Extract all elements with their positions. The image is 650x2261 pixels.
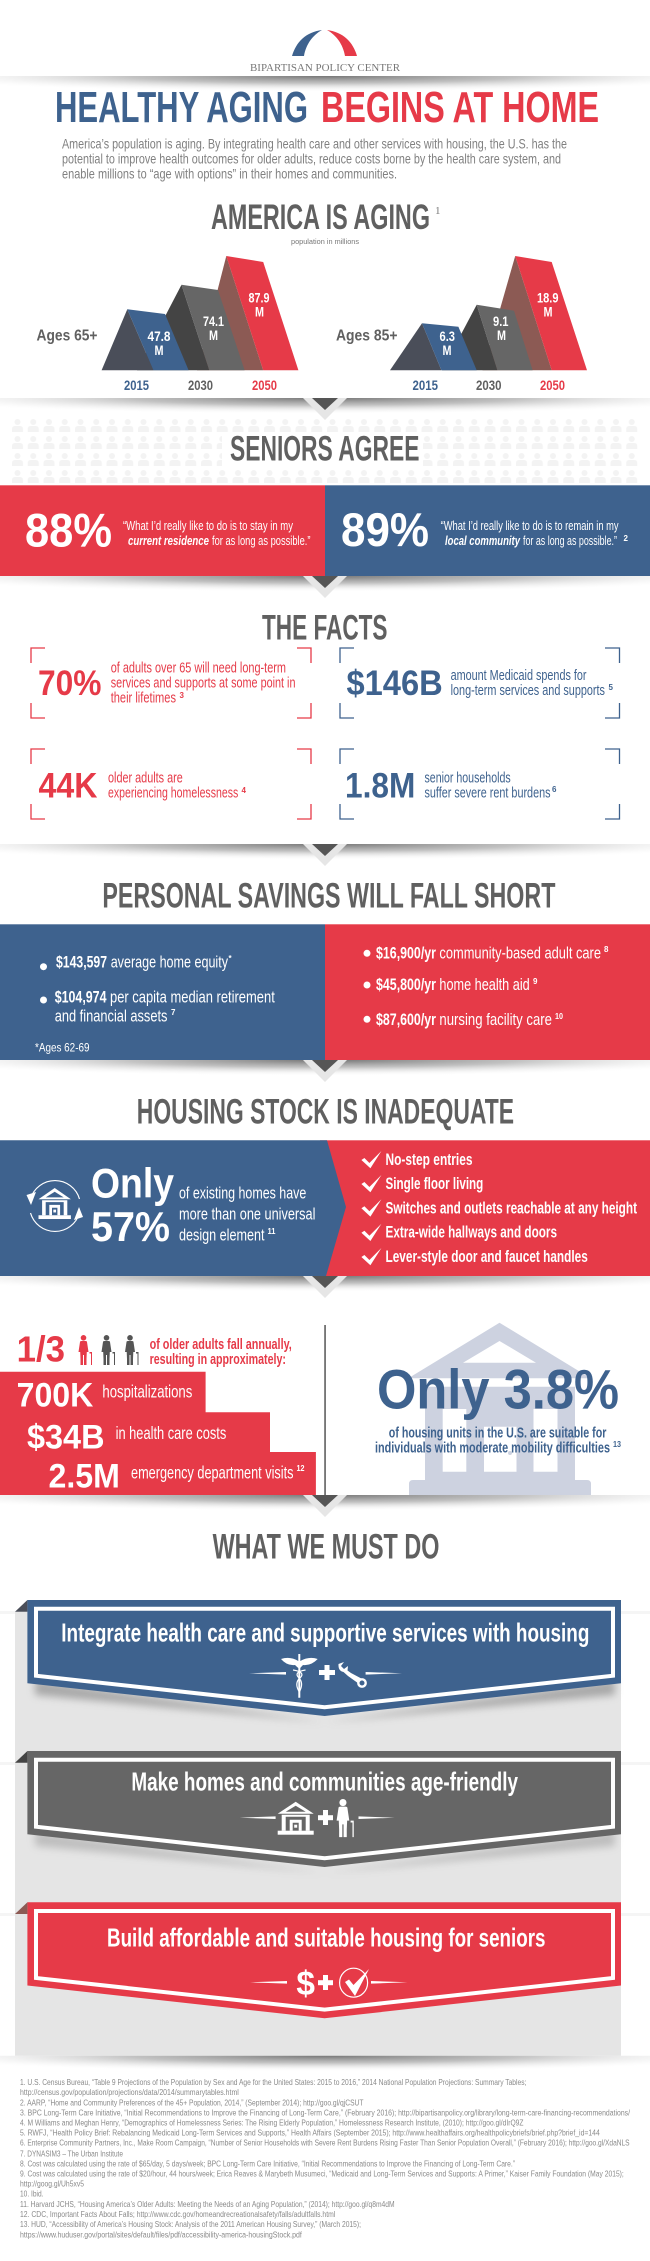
banner: age-friendly xyxy=(15,1751,621,1873)
panel: universal design list xyxy=(320,1140,650,1276)
panel: care costs xyxy=(325,924,650,1060)
chart: ages 85+: M xyxy=(497,328,506,343)
panel: savings: $143,597 xyxy=(56,953,107,971)
chart: ages 65+: 2015 xyxy=(124,377,149,393)
panel: falls: 700K xyxy=(17,1377,94,1415)
panel: care costs: 10 xyxy=(555,1012,563,1021)
chart: ages 85+: 2050 xyxy=(540,377,565,393)
footnotes: http://census.gov/population/projections/data/2014/summarytables.html xyxy=(20,2087,239,2097)
panel: 89%: 89% xyxy=(341,503,429,556)
fact: $146B: amount Medicaid spends for xyxy=(451,668,587,684)
chart: ages 65+: M xyxy=(209,328,218,343)
panel: care costs: 9 xyxy=(533,977,538,986)
panel: 88% xyxy=(0,485,325,576)
heading: America is aging: AMERICA IS AGING xyxy=(211,198,430,237)
chart: ages 65+: Ages 65+ xyxy=(36,328,98,345)
footnotes: 10. Ibid. xyxy=(20,2188,44,2198)
chart: ages 65+: 87.9 xyxy=(248,291,270,306)
arrow xyxy=(303,576,347,598)
panel: care costs: $87,600/yr xyxy=(376,1011,436,1029)
panel: falls: in health care costs xyxy=(116,1423,226,1443)
panel: 88%: “What I’d really like to do is to stay in my xyxy=(123,518,293,533)
icon: dollar, plus, check: $ xyxy=(296,1965,315,2003)
footnotes: 13. HUD, “Accessibility of America’s Housing Stock: Analysis of the 2011 American Housing Survey,” (March 2015); xyxy=(20,2219,361,2229)
panel: savings: *Ages 62-69 xyxy=(35,1041,90,1055)
fact: 1.8M: suffer severe rent burdens xyxy=(424,786,550,802)
panel: only 57%: Only xyxy=(91,1160,175,1207)
fact: 70% xyxy=(31,648,311,718)
title xyxy=(55,84,599,132)
chart: ages 85+: M xyxy=(544,305,552,320)
panel: falls: 1/3 xyxy=(17,1329,65,1370)
chart: ages 85+: 2015 xyxy=(412,377,438,393)
chart: ages 85+: 2030 xyxy=(476,377,502,393)
panel: falls: hospitalizations xyxy=(102,1382,192,1402)
chart: ages 65+: M xyxy=(255,305,264,320)
chart: ages 85+: M xyxy=(442,343,452,358)
icon: house, plus, older adult xyxy=(240,1799,395,1837)
chart: ages 85+: 6.3 xyxy=(440,329,455,344)
banner: age-friendly: Make homes and communities age-friendly xyxy=(131,1767,518,1797)
fact: 70%: of adults over 65 will need long-term xyxy=(111,661,286,677)
panel: only 3.8%: 13 xyxy=(613,1440,621,1449)
panel: universal design list: No-step entries xyxy=(386,1151,472,1169)
panel: savings: and financial assets xyxy=(55,1008,168,1026)
banner: integrate xyxy=(15,1600,621,1722)
fact: 1.8M: senior households xyxy=(424,771,511,787)
fact: 44K: older adults are xyxy=(108,771,183,787)
chart: ages 85+: 18.9 xyxy=(537,291,558,306)
heading: the facts: THE FACTS xyxy=(262,608,388,648)
panel: only 57%: design element xyxy=(179,1227,265,1245)
panel: care costs: community-based adult care xyxy=(439,945,601,963)
panel: savings: average home equity xyxy=(111,953,229,971)
fact: 1.8M: 6 xyxy=(552,785,557,794)
arrow xyxy=(303,1060,347,1082)
panel: care costs: $16,900/yr xyxy=(376,945,436,963)
chart: ages 65+: 2030 xyxy=(188,377,213,393)
panel: actions background xyxy=(15,1612,621,2056)
footnotes: http://goog.gl/Uh5xv5 xyxy=(20,2178,84,2188)
heading: America is aging: 1 xyxy=(435,205,440,217)
panel: only 57%: of existing homes have xyxy=(179,1184,306,1202)
fact: 70%: 3 xyxy=(180,691,184,700)
arrow xyxy=(303,844,347,866)
panel: 88%: for as long as possible.” xyxy=(212,533,310,548)
panel: falls: 12 xyxy=(296,1464,305,1473)
panel: falls xyxy=(0,1329,316,1495)
panel: only 57%: more than one universal xyxy=(179,1205,315,1223)
panel: care costs: nursing facility care xyxy=(439,1011,552,1029)
panel: falls: emergency department visits xyxy=(131,1462,294,1482)
panel: care costs: home health aid xyxy=(439,976,530,994)
panel: 88%: 88% xyxy=(25,504,112,557)
panel: only 57% xyxy=(0,1140,346,1276)
footnotes: 4. M Williams and Meghan Henry, “Demographics of Homelessness Series: The Rising Elderly Population,” Homelessness Research Institute, (2010); http://goo.gl/dIrQ9Z xyxy=(20,2118,524,2128)
fact: $146B xyxy=(340,648,620,718)
panel: falls: of older adults fall annually, xyxy=(150,1337,292,1353)
panel: 89%: 2 xyxy=(624,534,628,543)
panel: falls: 2.5M xyxy=(48,1457,120,1495)
chart: ages 65+: 2050 xyxy=(252,377,277,393)
icon: dollar, plus, check xyxy=(250,1965,408,2003)
fact: $146B: $146B xyxy=(346,664,443,703)
arrow xyxy=(303,398,347,420)
banner: affordable housing xyxy=(15,1902,621,2018)
footnotes: https://www.huduser.gov/portal/sites/default/files/pdf/accessibility-america-housingStock.pdf xyxy=(20,2230,302,2240)
panel: savings: $104,974 xyxy=(55,989,107,1007)
chart: ages 85+: Ages 85+ xyxy=(336,328,398,345)
fact: $146B: 5 xyxy=(608,683,614,692)
fact: 44K: experiencing homelessness xyxy=(108,786,238,802)
fact: 44K: 44K xyxy=(38,766,97,805)
panel: falls: resulting in approximately: xyxy=(150,1352,286,1368)
panel: care costs: 8 xyxy=(604,945,609,954)
heading: America is aging: population in millions xyxy=(291,237,359,246)
arrow xyxy=(303,1276,347,1298)
footnotes: 8. Cost was calculated using the rate of $65/day, 5 days/week; BPC Long-Term Care Initiative, “Initial Recommendations to Improve the Financing of Long-Term Care.” xyxy=(20,2158,515,2168)
icon: house with arrows xyxy=(26,1181,83,1231)
intro text xyxy=(62,136,567,182)
heading: what we must do: WHAT WE MUST DO xyxy=(213,1528,439,1566)
fact: 44K: 4 xyxy=(242,786,246,795)
icon: three older adults xyxy=(78,1335,138,1365)
chart: ages 85+ xyxy=(336,256,587,393)
chart: ages 65+: 74.1 xyxy=(203,314,224,329)
heading: America is aging xyxy=(211,198,440,246)
footnotes xyxy=(20,2077,630,2240)
panel: 89% xyxy=(325,485,650,576)
fact: 44K xyxy=(31,749,311,819)
panel: savings xyxy=(0,924,325,1060)
panel: savings: per capita median retirement xyxy=(110,989,275,1007)
footnotes: 7. DYNASIM3 – The Urban Institute xyxy=(20,2148,123,2158)
panel: falls: $34B xyxy=(27,1418,104,1456)
fact: 1.8M xyxy=(340,749,620,819)
icon: building xyxy=(408,1323,591,1495)
heading: seniors agree: SENIORS AGREE xyxy=(230,430,420,469)
footnotes: 2. AARP, “Home and Community Preferences of the 45+ Population, 2014,” (September 2014); http://goo.gl/qjCSUT xyxy=(20,2098,364,2108)
intro text: enable millions to “age with options” in their homes and communities. xyxy=(62,166,397,182)
divider line xyxy=(324,1325,326,1495)
panel: 89%: local community xyxy=(445,533,521,548)
chart: ages 85+: 9.1 xyxy=(493,314,509,329)
panel: savings: * xyxy=(228,954,232,963)
people pattern xyxy=(12,419,642,484)
panel: universal design list: Single floor living xyxy=(386,1175,483,1193)
panel: care costs: $45,800/yr xyxy=(376,976,436,994)
title: HEALTHY AGING xyxy=(55,84,308,132)
chart: ages 65+ xyxy=(36,256,298,393)
chart: ages 65+: 47.8 xyxy=(148,329,171,344)
footnotes: 12. CDC, Important Facts About Falls; http://www.cdc.gov/homeandrecreationalsafety/falls/adultfalls.html xyxy=(20,2209,335,2219)
logo xyxy=(250,30,400,74)
panel: 88%: current residence xyxy=(128,533,209,548)
panel: only 3.8% xyxy=(375,1323,621,1495)
fact: 70%: their lifetimes xyxy=(111,691,176,707)
fact: 70%: services and supports at some point in xyxy=(111,676,296,692)
logo: BIPARTISAN POLICY CENTER xyxy=(250,63,400,74)
panel: savings: 7 xyxy=(171,1008,176,1017)
footnotes: 11. Harvard JCHS, “Housing America’s Older Adults: Meeting the Needs of an Aging Population,” (2014); http://goo.gl/q8m4dM xyxy=(20,2199,395,2209)
panel: only 57%: 57% xyxy=(91,1203,170,1250)
arrow xyxy=(303,1495,347,1517)
chart: ages 65+: M xyxy=(154,343,164,358)
fact: 1.8M: 1.8M xyxy=(345,766,415,805)
icon: caduceus, plus, wrench xyxy=(249,1654,402,1698)
fact: 70%: 70% xyxy=(38,664,102,703)
panel: universal design list: Extra-wide hallways and doors xyxy=(386,1224,557,1242)
panel: only 57%: 11 xyxy=(268,1227,276,1236)
panel: only 3.8%: Only 3.8% xyxy=(377,1357,619,1420)
